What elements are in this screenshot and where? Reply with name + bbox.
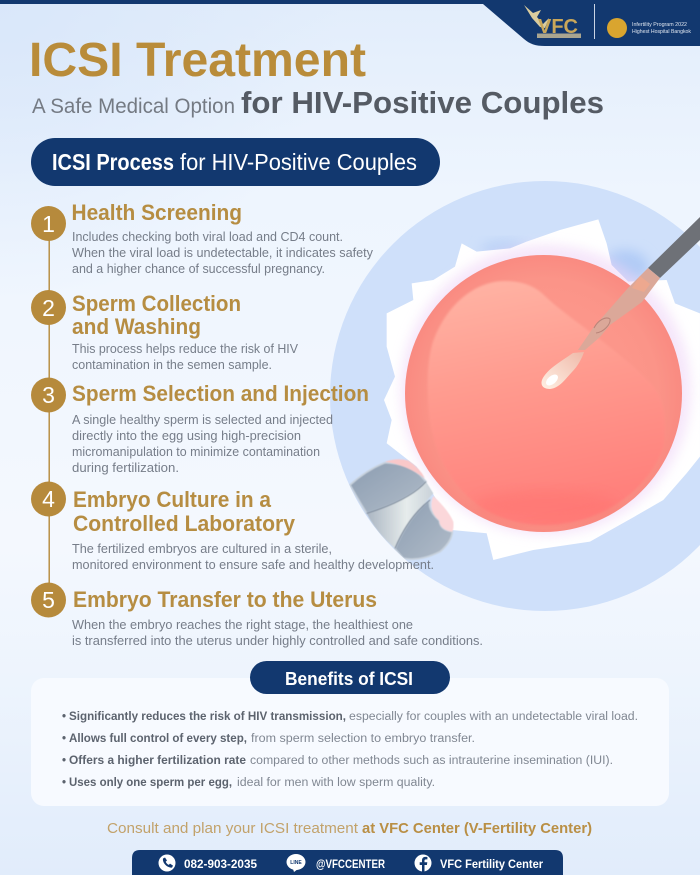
step 4: 4 (42, 486, 55, 512)
egg inner cytoplasm (428, 281, 665, 525)
step 1: 1 (42, 211, 55, 237)
contact bar (132, 850, 563, 875)
step 2 (31, 290, 299, 372)
step 2: This process helps reduce the risk of HIV (72, 342, 299, 356)
logo: VFC: VFC (538, 16, 578, 38)
step 2: contamination in the semen sample. (72, 358, 272, 372)
call to action: at VFC Center (V-Fertility Center) (362, 820, 592, 837)
step 3: 3 (42, 382, 55, 408)
step 1: When the viral load is undetectable, it indicates safety (72, 246, 374, 260)
benefit 3: • (62, 755, 66, 767)
step 3: directly into the egg using high-precision (72, 429, 301, 443)
step 4: Embryo Culture in a (73, 487, 272, 512)
benefit 4: • (62, 777, 66, 789)
step 5: When the embryo reaches the right stage, the healthiest one (72, 618, 413, 632)
benefit 1: especially for couples with an undetectable viral load. (349, 711, 638, 723)
call to action (107, 820, 592, 837)
step 2: 2 (42, 295, 55, 321)
benefit 4: ideal for men with low sperm quality. (237, 777, 435, 789)
logo: VFC (524, 5, 581, 38)
step 1 (31, 200, 374, 276)
timeline connector (48, 224, 50, 600)
injection pipette (541, 217, 700, 389)
benefits heading (250, 661, 450, 694)
benefit 2: • (62, 733, 66, 745)
benefit 1 (62, 711, 638, 723)
icon: phone (158, 854, 176, 872)
step 3: Sperm Selection and Injection (72, 381, 369, 406)
step 4: The fertilized embryos are cultured in a sterile, (72, 542, 332, 556)
step 5 (31, 582, 483, 648)
step 4: Controlled Laboratory (73, 511, 296, 536)
step 5: Embryo Transfer to the Uterus (73, 587, 377, 612)
benefit 3: Offers a higher fertilization rate (69, 755, 246, 767)
badge: infertility program: Infertility Program 2022 (632, 22, 687, 28)
pill heading: ICSI process: ICSI Process (52, 149, 174, 175)
step 5: 5 (42, 587, 55, 613)
title: ICSI Treatment (29, 34, 366, 87)
icon: line: LINE (290, 860, 302, 866)
egg (405, 255, 682, 532)
benefit 3: compared to other methods such as intrauterine insemination (IUI). (250, 755, 613, 767)
cumulus cells (384, 219, 700, 560)
step 1: and a higher chance of successful pregnancy. (72, 262, 325, 276)
step 3: during fertilization. (72, 461, 179, 475)
step 3 (31, 378, 369, 475)
step 3: micromanipulation to minimize contamination (72, 445, 320, 459)
contact bar: @VFCCENTER (316, 859, 386, 871)
panel: benefits (31, 661, 669, 806)
illustration: ICSI egg injection (330, 181, 700, 611)
icon: facebook (414, 854, 432, 872)
badge: infertility program (607, 18, 691, 38)
step 4 (31, 482, 434, 572)
benefit 2 (62, 733, 475, 745)
step 5: is transferred into the uterus under highly controlled and safe conditions. (72, 634, 483, 648)
step 2: and Washing (72, 314, 201, 339)
benefit 4 (62, 777, 435, 789)
subtitle: A Safe Medical Option (32, 95, 235, 118)
pill heading: ICSI process (31, 138, 440, 186)
step 2: Sperm Collection (72, 291, 241, 316)
step 3: A single healthy sperm is selected and injected (72, 413, 333, 427)
benefit 2: from sperm selection to embryo transfer. (251, 733, 475, 745)
blue backdrop circle (330, 181, 700, 611)
holding pipette (350, 459, 454, 559)
subtitle (32, 85, 604, 120)
contact bar: 082-903-2035 (184, 859, 258, 871)
call to action: Consult and plan your ICSI treatment (107, 820, 359, 837)
subtitle: for HIV-Positive Couples (241, 85, 604, 120)
benefits heading: Benefits of ICSI (285, 669, 413, 689)
pill heading: ICSI process: for HIV-Positive Couples (180, 149, 417, 175)
benefit 1: • (62, 711, 66, 723)
benefit 1: Significantly reduces the risk of HIV transmission, (69, 711, 346, 723)
badge: infertility program: Highest Hospital Bangkok (632, 29, 691, 35)
step 1: Includes checking both viral load and CD4 count. (72, 230, 343, 244)
benefit 3 (62, 755, 613, 767)
step 4: monitored environment to ensure safe and healthy development. (72, 558, 434, 572)
benefit 2: Allows full control of every step, (69, 733, 247, 745)
contact bar: VFC Fertility Center (440, 859, 543, 871)
benefit 4: Uses only one sperm per egg, (69, 777, 232, 789)
header band with logo (0, 0, 700, 46)
step 1: Health Screening (72, 200, 242, 225)
icon: line (286, 854, 306, 872)
